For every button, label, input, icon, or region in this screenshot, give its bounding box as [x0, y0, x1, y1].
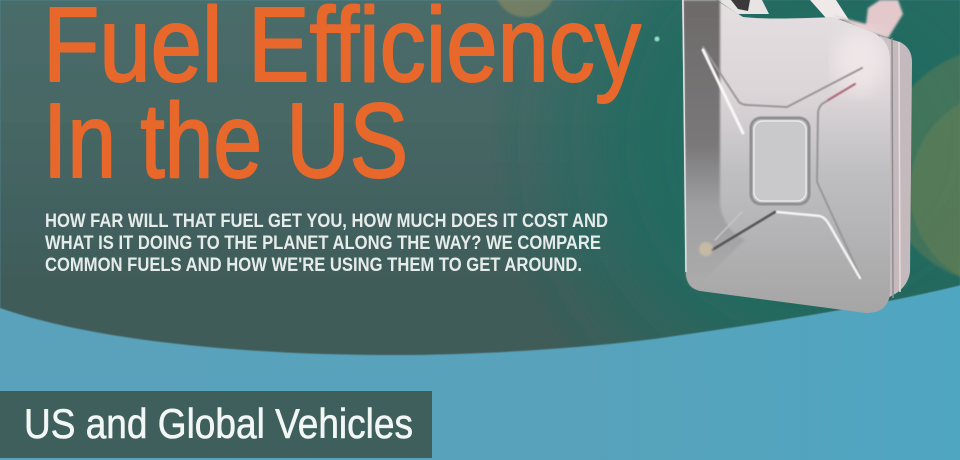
handles: [717, 0, 769, 14]
intro paragraph: [45, 211, 608, 276]
dark left side: [683, 0, 745, 288]
decorative bokeh circles: [494, 0, 960, 290]
intro paragraph: COMMON FUELS AND HOW WE'RE USING THEM TO GET AROUND.: [45, 255, 582, 276]
intro paragraph: HOW FAR WILL THAT FUEL GET YOU, HOW MUCH DOES IT COST AND: [45, 211, 608, 232]
intro paragraph: WHAT IS IT DOING TO THE PLANET ALONG THE WAY? WE COMPARE: [45, 233, 601, 254]
spout: [833, 0, 903, 38]
title: [43, 0, 641, 200]
cap dot: [699, 242, 713, 256]
embossed X ribs: [703, 47, 862, 278]
pink highlight: [834, 30, 886, 94]
section heading: US and Global Vehicles: US and Global Vehicles: [24, 400, 413, 447]
body: [682, 0, 890, 313]
side seams: [880, 36, 912, 302]
title: In the US: [43, 82, 408, 200]
dark green header panel with curved bottom: [0, 0, 960, 355]
section heading: US and Global Vehicles: [0, 391, 432, 458]
centre rounded panel: [751, 118, 809, 204]
icon: silver jerry can: [682, 0, 912, 313]
